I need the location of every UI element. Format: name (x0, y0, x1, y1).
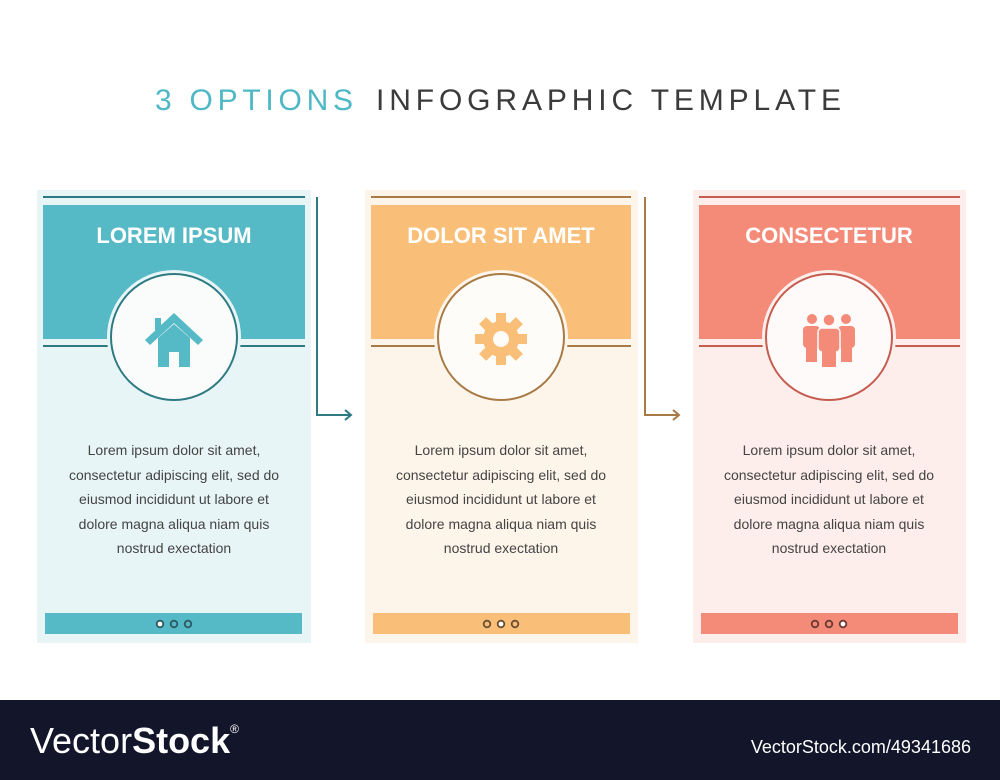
text block: nostrud exectation (117, 540, 231, 556)
footer: vectorstock banner: VectorStock.com/49341686 (751, 737, 971, 757)
text block: dolore magna aliqua niam quis (79, 516, 269, 532)
text block: nostrud exectation (772, 540, 886, 556)
text block: consectetur adipiscing elit, sed do (396, 467, 606, 483)
footer: vectorstock banner (0, 700, 1000, 780)
heading: LOREM IPSUM (96, 223, 252, 248)
icon: house (145, 313, 203, 367)
footer bar (373, 613, 630, 634)
text block: eiusmod incididunt ut labore et (79, 491, 269, 507)
footer: vectorstock banner: ® (230, 722, 239, 736)
panel: dolor sit amet (365, 190, 638, 643)
text block: dolore magna aliqua niam quis (406, 516, 596, 532)
icon: people (803, 314, 855, 367)
footer bar (701, 613, 958, 634)
text block (69, 442, 279, 556)
heading: CONSECTETUR (745, 223, 913, 248)
text block: Lorem ipsum dolor sit amet, (415, 442, 587, 458)
text block: eiusmod incididunt ut labore et (406, 491, 596, 507)
icon: gear (475, 313, 527, 365)
text block: nostrud exectation (444, 540, 558, 556)
text block: Lorem ipsum dolor sit amet, (743, 442, 915, 458)
title (155, 84, 843, 117)
arrow 2 (645, 197, 679, 420)
text block: consectetur adipiscing elit, sed do (724, 467, 934, 483)
text block: Lorem ipsum dolor sit amet, (88, 442, 260, 458)
panel: lorem ipsum (37, 190, 311, 643)
text block: consectetur adipiscing elit, sed do (69, 467, 279, 483)
text block: eiusmod incididunt ut labore et (734, 491, 924, 507)
text block: dolore magna aliqua niam quis (734, 516, 924, 532)
title: 3 OPTIONS (155, 84, 355, 117)
header band (43, 205, 305, 339)
title: INFOGRAPHIC TEMPLATE (376, 84, 843, 117)
text block (396, 442, 606, 556)
heading: DOLOR SIT AMET (407, 223, 595, 248)
footer bar (45, 613, 302, 634)
arrow 1 (317, 197, 351, 420)
panel: consectetur (693, 190, 966, 643)
text block (724, 442, 934, 556)
footer: vectorstock banner: VectorStock (30, 720, 230, 761)
